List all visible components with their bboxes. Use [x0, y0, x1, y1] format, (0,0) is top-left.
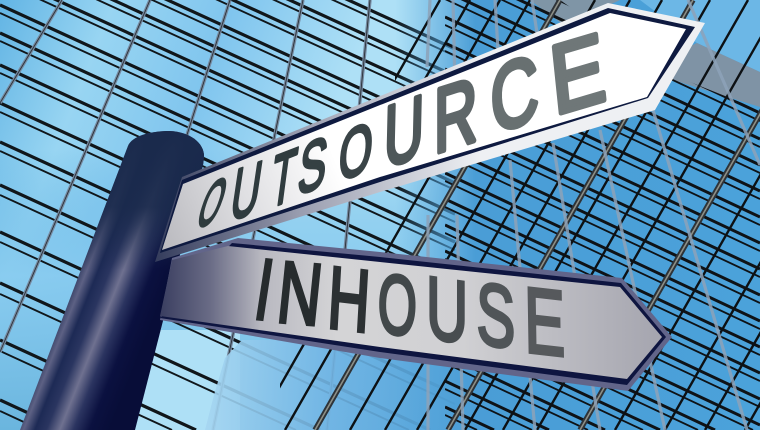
background: right glass facade: [280, 0, 760, 430]
label: INHOUSE: [249, 242, 566, 376]
label: INHOUSE: E: [523, 268, 566, 376]
label: OUTSOURCE: O: [189, 163, 235, 244]
sign rim: inhouse: [160, 238, 672, 391]
sign rim: outsource: [155, 3, 705, 262]
sign: OUTSOURCE arrow: [155, 3, 705, 262]
label: OUTSOURCE: R: [434, 57, 477, 173]
label: INHOUSE: U: [426, 257, 468, 362]
sign: INHOUSE arrow: [160, 238, 672, 391]
label: INHOUSE: H: [325, 247, 373, 351]
sign face: outsource: [162, 13, 686, 250]
sign border: outsource: [160, 8, 695, 253]
label: OUTSOURCE: O: [336, 105, 375, 197]
label: OUTSOURCE: C: [488, 35, 541, 154]
sign face: inhouse: [160, 246, 662, 379]
label: OUTSOURCE: T: [266, 132, 301, 224]
background: curved building reflection: [205, 340, 470, 430]
signpost pole: [20, 131, 204, 430]
label: INHOUSE: S: [476, 263, 516, 368]
label: OUTSOURCE: U: [226, 144, 267, 237]
label: INHOUSE: O: [377, 255, 418, 354]
label: OUTSOURCE: S: [295, 119, 332, 211]
label: OUTSOURCE: E: [545, 13, 610, 136]
label: INHOUSE: I: [249, 242, 279, 339]
label: INHOUSE: N: [273, 243, 327, 344]
sign border: inhouse: [160, 243, 666, 385]
label: OUTSOURCE: [189, 13, 610, 244]
label: OUTSOURCE: U: [383, 76, 425, 187]
